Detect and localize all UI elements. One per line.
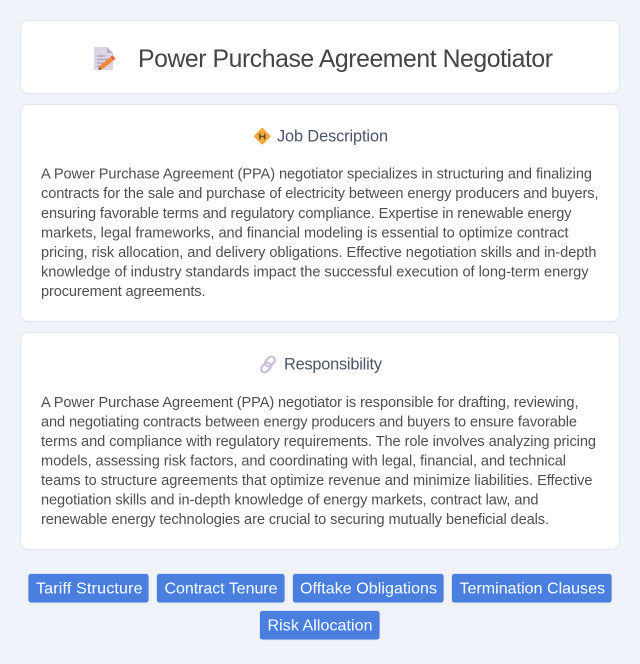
tag: risk allocation xyxy=(260,610,380,640)
text block: job description: contracts for the sale and purchase of electricity between energy producers and buyers, xyxy=(41,186,598,202)
heading: responsibility: Responsibility xyxy=(284,356,383,374)
text block: responsibility: A Power Purchase Agreement (PPA) negotiator is responsible for drafting, reviewing, xyxy=(41,395,578,411)
text block: job description: pricing, risk allocation, and delivery obligations. Effective negotiation skills and in-depth xyxy=(41,245,596,261)
tag: termination clauses: Termination Clauses xyxy=(460,580,605,598)
text block: job description xyxy=(41,166,598,300)
text block: responsibility: models, assessing risk factors, and coordinating with legal, financial, and technical xyxy=(41,454,566,470)
text block: responsibility: renewable energy technologies are crucial to securing mutually beneficial deals. xyxy=(41,512,549,528)
text block: job description: ensuring favorable terms and regulatory compliance. Expertise in renewable energy xyxy=(41,206,572,222)
panel: job description xyxy=(20,104,620,322)
icon: chain link xyxy=(260,355,276,374)
icon: diamond sign xyxy=(253,127,271,145)
text block: responsibility: terms and compliance with regulatory requirements. The role involves analyzing pricing xyxy=(41,434,596,450)
heading: job description: Job Description xyxy=(277,128,388,146)
title text: Power Purchase Agreement Negotiator xyxy=(138,46,553,73)
tag: tariff structure xyxy=(28,574,149,603)
text block: job description: knowledge of industry standards impact the successful execution of long-term energy xyxy=(41,264,589,280)
text block: job description: markets, legal frameworks, and financial modeling is essential to optimize contract xyxy=(41,226,568,242)
text block: responsibility xyxy=(41,395,596,528)
tag: tariff structure: Tariff Structure xyxy=(36,580,143,598)
panel: responsibility xyxy=(20,332,620,550)
panel: title xyxy=(20,20,620,94)
tag: offtake obligations: Offtake Obligations xyxy=(300,580,437,598)
text block: job description: procurement agreements. xyxy=(41,284,206,300)
tag: risk allocation: Risk Allocation xyxy=(268,618,372,634)
tag row xyxy=(28,574,612,640)
tag: termination clauses xyxy=(452,574,612,603)
text block: responsibility: negotiation skills and in-depth knowledge of energy markets, contract law, and xyxy=(41,492,538,508)
text block: responsibility: and negotiating contracts between energy producers and buyers to ensure favorable xyxy=(41,414,577,430)
icon: document with pencil xyxy=(94,47,116,70)
tag: contract tenure: Contract Tenure xyxy=(164,580,278,598)
text block: job description: A Power Purchase Agreement (PPA) negotiator specializes in structuring and finalizing xyxy=(41,166,592,182)
text block: responsibility: teams to structure agreements that optimize revenue and minimize liabilities. Effective xyxy=(41,473,592,489)
tag: contract tenure xyxy=(156,574,285,603)
tag: offtake obligations xyxy=(292,574,444,603)
